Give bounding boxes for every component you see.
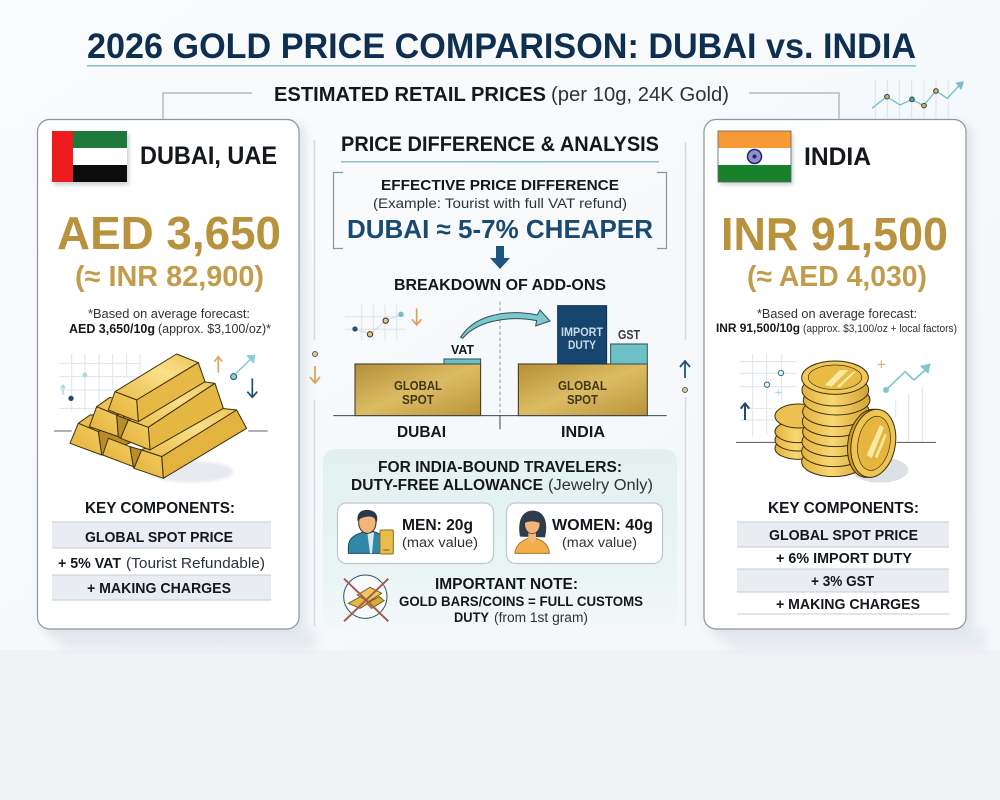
bar chart: add-ons: SPOT [567,392,598,407]
important note [399,576,643,625]
heading: key components: KEY COMPONENTS: [85,500,235,517]
icon: sparkline top right [872,80,964,118]
heading: analysis: PRICE DIFFERENCE & ANALYSIS [341,133,659,156]
bar chart: add-ons: DUTY [568,338,596,352]
forecast note: INR 91,500/10g [716,321,800,335]
heading: breakdown: BREAKDOWN OF ADD-ONS [394,277,606,294]
card: women: WOMEN: 40g [552,517,653,534]
bar chart: add-ons: VAT [451,343,474,357]
panel: travelers allowance [323,449,677,630]
price: INR equivalent: (≈ INR 82,900) [75,261,264,293]
bar chart: add-ons [333,302,667,441]
table: Dubai components: GLOBAL SPOT PRICE [85,529,233,546]
card: women [506,503,662,564]
icon: gold coins [736,354,936,483]
icon: UAE flag [52,131,129,185]
arrow: down [490,246,510,269]
heading: Dubai: DUBAI, UAE [140,142,277,170]
forecast note: *Based on average forecast: [88,307,250,321]
forecast note: AED 3,650/10g [69,322,155,336]
panel: Dubai [38,120,305,633]
card: men: MEN: 20g [402,517,473,534]
table: Dubai components: + 5% VAT [58,555,121,572]
icon: left divider marks [310,352,320,383]
connector right [749,93,839,119]
bar chart: add-ons: GLOBAL [394,378,442,393]
forecast note: (approx. $3,100/oz)* [158,322,271,336]
table: India components: GLOBAL SPOT PRICE [769,527,918,544]
callout: effective difference [334,172,666,248]
table: India components [737,522,949,614]
card: men [338,503,494,564]
title: 2026 GOLD PRICE COMPARISON: DUBAI vs. INDIA [87,27,916,66]
card: men: (max value) [402,535,478,550]
table: Dubai components: + MAKING CHARGES [87,580,231,597]
icon: gold bars [54,354,268,482]
important note: GOLD BARS/COINS = FULL CUSTOMS [399,593,643,609]
heading: travelers: DUTY-FREE ALLOWANCE [351,477,543,494]
card: women: (max value) [562,535,637,550]
forecast note [69,307,271,336]
heading: key components: KEY COMPONENTS: [768,500,919,517]
subtitle: (per 10g, 24K Gold) [551,84,729,106]
callout: effective difference: EFFECTIVE PRICE DIFFERENCE [381,177,619,194]
icon: right divider marks [680,361,690,392]
icon: no gold bars [344,575,388,621]
forecast note [716,307,957,335]
important note: IMPORTANT NOTE: [435,576,578,593]
icon: man [348,510,393,554]
icon: India flag [718,131,793,185]
callout: effective difference: (Example: Tourist with full VAT refund) [373,195,627,211]
divider right [684,142,686,626]
heading: India: INDIA [804,143,871,171]
important note: (from 1st gram) [494,610,588,625]
bar chart: add-ons: GST [618,328,640,342]
icon: woman [515,511,549,553]
bar chart: add-ons: DUBAI [397,424,446,441]
table: Dubai components [52,522,271,600]
price: INR: INR 91,500 [721,208,948,260]
bar chart: add-ons: INDIA [561,424,605,441]
table: India components: + MAKING CHARGES [776,596,920,613]
bar chart: add-ons: IMPORT [561,325,604,339]
subtitle [274,84,729,106]
heading: travelers [351,459,653,494]
heading: travelers: (Jewelry Only) [548,477,653,494]
important note: DUTY [454,610,489,625]
panel: India [704,120,972,633]
price: AED equivalent: (≈ AED 4,030) [747,261,927,293]
forecast note: *Based on average forecast: [757,307,917,321]
price: AED: AED 3,650 [57,207,281,259]
table: India components: + 3% GST [811,573,874,590]
bar chart: add-ons: GLOBAL [558,378,607,393]
callout: effective difference: DUBAI ≈ 5-7% CHEAPER [347,214,653,244]
bar chart: add-ons: SPOT [402,392,434,407]
divider left [314,140,316,626]
heading: travelers: FOR INDIA-BOUND TRAVELERS: [378,459,622,476]
forecast note: (approx. $3,100/oz + local factors) [803,323,957,335]
table: Dubai components: (Tourist Refundable) [126,555,265,572]
panel: price difference [323,133,677,630]
connector left [163,93,252,119]
table: India components: + 6% IMPORT DUTY [776,550,912,567]
subtitle: ESTIMATED RETAIL PRICES [274,84,546,106]
